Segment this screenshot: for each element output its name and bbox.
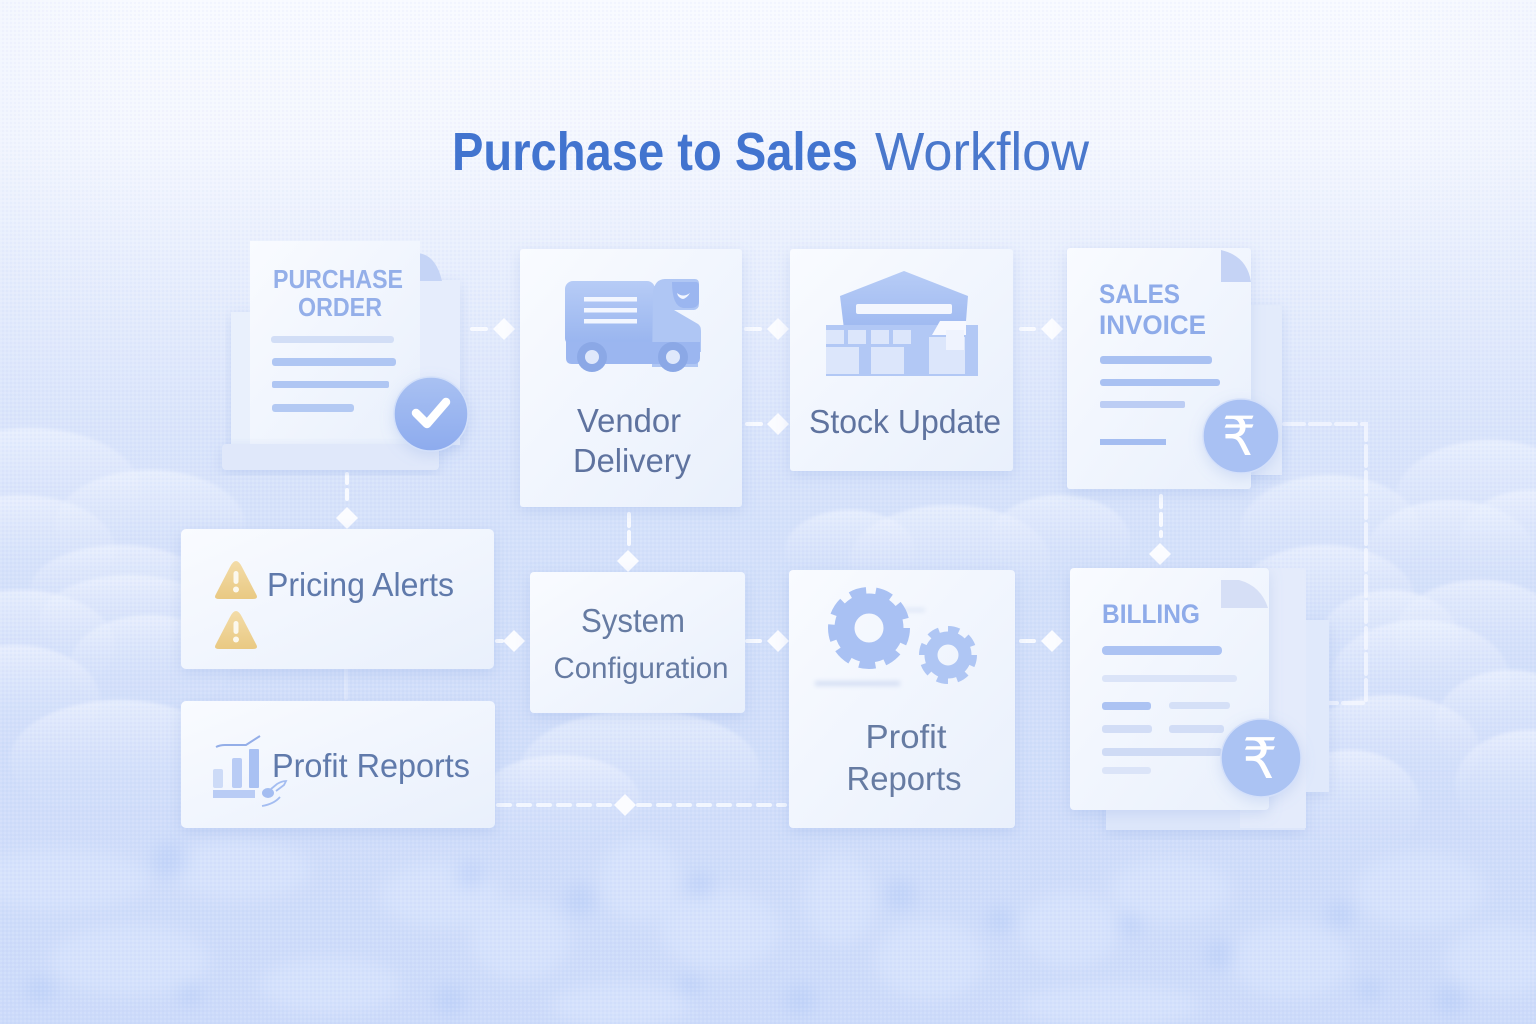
panel: vendor delivery: Delivery [573,442,691,479]
panel: sales invoice: INVOICE [1099,310,1206,340]
panel: profit reports wide: Profit Reports [272,747,470,784]
panel: billing [1070,568,1329,830]
icon: rupee badge: ₹ [1242,727,1278,792]
panel: stock update: Stock Update [809,403,1001,440]
panel: profit reports gears: Reports [846,760,962,797]
panel: stock update [790,249,1013,471]
panel: purchase order: ORDER [298,292,382,322]
connector diamonds [336,318,1171,816]
icon: warning top [215,561,257,599]
icon: rupee badge [1203,399,1279,473]
icon: large gear [832,592,906,664]
panel: vendor delivery [520,249,742,507]
panel: profit reports wide [181,701,495,828]
panel: billing: BILLING [1102,599,1200,629]
panel: purchase order [222,241,468,470]
title: Purchase to Sales [452,122,858,182]
panel: system configuration [530,572,745,713]
panel: system configuration: System [581,602,685,639]
dashed connectors [346,329,1366,805]
panel: purchase order: PURCHASE [273,264,403,294]
panel: profit reports gears: Profit [866,718,946,755]
panel: sales invoice: SALES [1099,279,1180,309]
icon: small gear [922,630,974,680]
icon: rupee badge: ₹ [1222,405,1256,468]
panel: pricing alerts [181,529,494,669]
panel: pricing alerts: Pricing Alerts [267,566,454,603]
panel: system configuration: Configuration [554,652,728,685]
icon: rupee badge [1221,719,1301,797]
panel: sales invoice [1067,248,1282,489]
icon: check badge [394,377,468,451]
panel: profit reports gears [789,570,1015,828]
title: Workflow [875,122,1090,182]
icon: warehouse [826,271,978,376]
lower mottled cloud bank [0,838,1536,1024]
icon: delivery truck [565,279,701,372]
icon: warning bottom [215,611,257,649]
icon: bar chart [213,736,286,806]
panel: vendor delivery: Vendor [577,402,681,439]
